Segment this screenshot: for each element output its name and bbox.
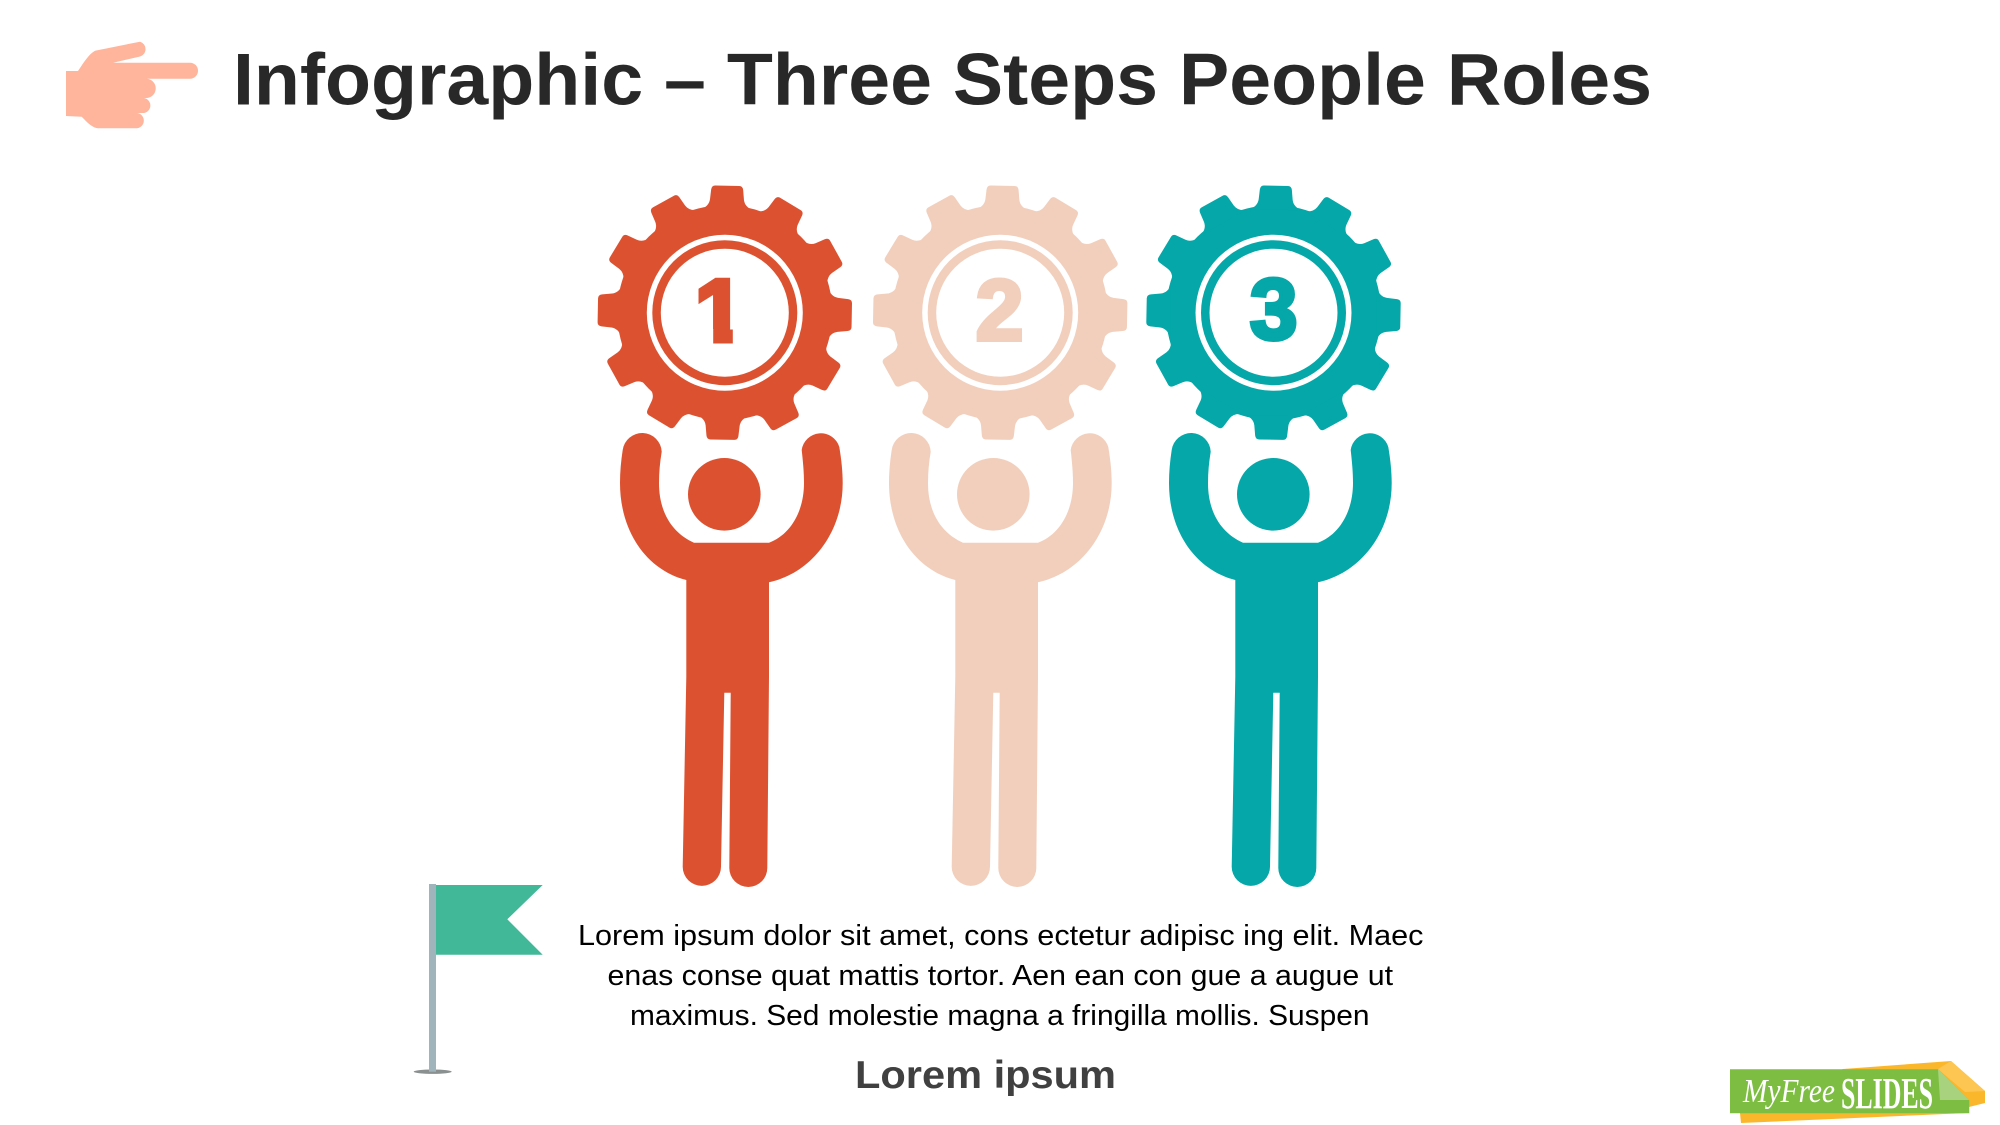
body text bbox=[578, 920, 1424, 1032]
logo: MyFree Slides bbox=[1730, 1061, 1985, 1123]
logo: MyFree Slides: MyFree bbox=[1742, 1073, 1835, 1110]
title: Infographic – Three Steps People Roles bbox=[233, 40, 1652, 121]
number 2: 2 bbox=[976, 263, 1024, 359]
step 3: person figure bbox=[1169, 433, 1392, 887]
logo: MyFree Slides: SLIDES bbox=[1841, 1069, 1933, 1118]
body text: Lorem ipsum dolor sit amet, cons ectetur adipisc ing elit. Maec bbox=[578, 920, 1424, 952]
icon: pointing hand bbox=[66, 42, 198, 128]
step 1: gear with number 1 bbox=[597, 185, 852, 440]
step 1: person figure bbox=[620, 433, 843, 887]
body text: maximus. Sed molestie magna a fringilla mollis. Suspen bbox=[630, 1000, 1370, 1032]
icon: flag bbox=[414, 884, 543, 1074]
step 2: person figure bbox=[889, 433, 1112, 887]
number 1: 1 bbox=[695, 261, 744, 360]
caption heading: Lorem ipsum bbox=[855, 1054, 1116, 1097]
body text: enas conse quat mattis tortor. Aen ean con gue a augue ut bbox=[608, 960, 1393, 992]
step 2: gear with number 2 bbox=[873, 185, 1128, 440]
number 3: 3 bbox=[1250, 262, 1298, 358]
step 3: gear with number 3 bbox=[1146, 185, 1401, 440]
